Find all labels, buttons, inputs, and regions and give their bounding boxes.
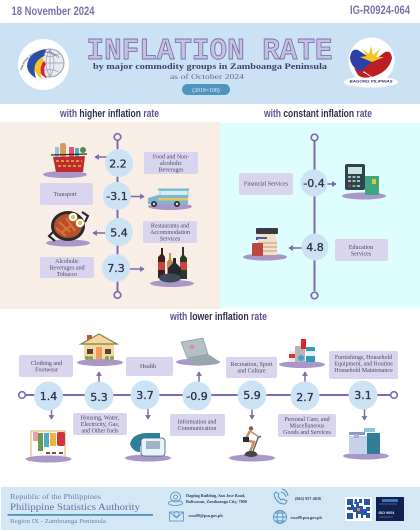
value 2.2: 2.2 xyxy=(109,158,127,170)
icon: grocery basket xyxy=(43,143,87,178)
icon: calculator and card xyxy=(342,164,386,200)
label: restaurants: Accommodation xyxy=(150,230,190,236)
label: housing: and Other fuels xyxy=(82,428,119,434)
value 1.4 xyxy=(34,382,63,419)
label: housing: Electricity, Gas, xyxy=(81,422,120,428)
label: alcoholic: Tobacco xyxy=(57,272,77,278)
label: restaurants xyxy=(143,221,197,243)
title: INFLATION RATE xyxy=(86,34,332,69)
value 5.4 xyxy=(93,218,133,246)
icon: cyclist xyxy=(229,426,275,462)
agency name: Republic of the Philippines xyxy=(10,493,101,501)
label: housing xyxy=(73,413,127,435)
label: clothing: Footwear xyxy=(35,368,58,374)
ISO badge: ISO 9001 xyxy=(378,511,395,515)
agency name xyxy=(8,493,153,525)
label: food: Beverages xyxy=(158,168,184,174)
value -0.4 xyxy=(300,170,336,196)
panel: lower inflation xyxy=(19,334,398,462)
value 2.2 xyxy=(95,149,133,177)
timeline xyxy=(311,134,318,299)
label: restaurants: Services xyxy=(160,236,181,242)
value -3.1: -3.1 xyxy=(106,190,128,203)
label: health: Health xyxy=(140,364,156,370)
label: recreation: Recreation, Sport xyxy=(230,362,273,368)
base year pill xyxy=(182,84,230,95)
header band xyxy=(0,23,420,104)
label: transport: Transport xyxy=(53,192,77,198)
label: furnishings xyxy=(329,351,398,379)
heading: lower: with lower inflation rate xyxy=(169,311,267,323)
panel: constant inflation xyxy=(220,123,420,308)
label: furnishings: Furnishings, Household xyxy=(335,355,392,361)
icon: bottles xyxy=(150,247,194,287)
value 3.7: 3.7 xyxy=(136,389,154,402)
label: personal care: Goods and Services xyxy=(283,430,331,436)
date: 18 November 2024 xyxy=(12,4,95,18)
value 3.7 xyxy=(130,380,160,419)
label: education xyxy=(335,239,388,261)
website: rsso09.psa.gov.ph xyxy=(290,515,322,520)
icon: blood pressure monitor xyxy=(125,433,171,462)
label: financial: Financial Services xyxy=(244,182,289,188)
label: furnishings: Equipment, and Routine xyxy=(334,362,393,368)
icon: jeepney xyxy=(148,188,192,210)
heading: higher: with higher inflation rate xyxy=(59,108,159,120)
icon: email xyxy=(170,512,184,521)
phone number: (062) 957-4636 xyxy=(295,496,321,501)
label: personal care: Personal Care, and xyxy=(284,417,330,423)
address xyxy=(186,493,247,504)
value 5.9 xyxy=(238,380,266,419)
label: alcoholic: Beverages and xyxy=(49,266,85,272)
label: housing: Housing, Water, xyxy=(81,416,120,422)
value 5.4: 5.4 xyxy=(110,226,128,240)
label: personal care xyxy=(278,414,336,437)
value 5.3: 5.3 xyxy=(90,391,108,404)
icon: clothes rack xyxy=(26,431,72,462)
icon: home furnishings xyxy=(343,428,389,460)
label: food: alcoholic xyxy=(160,161,182,167)
timeline xyxy=(114,134,121,298)
value 4.8 xyxy=(289,234,328,260)
icon: personal care products xyxy=(279,339,325,368)
address: Baliwasan, Zamboanga City, 7000 xyxy=(186,499,247,504)
logo: Bagong Pilipinas xyxy=(344,38,398,88)
label: food xyxy=(144,152,198,174)
icon: house xyxy=(77,334,123,366)
logo: Bagong Pilipinas: BAGONG PILIPINAS xyxy=(350,78,393,84)
QR code xyxy=(345,497,372,521)
label: education: Services xyxy=(351,252,372,258)
as of date: as of October 2024 xyxy=(170,72,244,81)
panel: higher inflation xyxy=(0,122,220,309)
agency name: Philippine Statistics Authority xyxy=(10,503,140,513)
value 2.7 xyxy=(290,372,320,410)
value 4.8: 4.8 xyxy=(306,241,324,254)
logo: PSA xyxy=(18,39,69,90)
label: restaurants: Restaurants and xyxy=(151,224,189,230)
logo: PSA: PHILIPPINE STATISTICS AUTHORITY xyxy=(20,50,60,70)
icon: phone xyxy=(274,489,288,504)
value 3.1 xyxy=(348,380,378,420)
label: transport xyxy=(40,183,93,205)
value 1.4: 1.4 xyxy=(40,390,57,403)
value -3.1 xyxy=(103,182,144,210)
subtitle: by major commodity groups in Zamboanga Peninsula xyxy=(93,61,328,71)
timeline xyxy=(19,392,397,398)
label: food: Food and Non- xyxy=(153,154,189,160)
label: recreation xyxy=(226,357,277,378)
email: rsso09@psa.gov.ph xyxy=(188,513,223,518)
value 5.9: 5.9 xyxy=(243,389,261,402)
footer xyxy=(1,487,420,530)
value -0.9 xyxy=(182,372,212,410)
label: health xyxy=(126,357,173,376)
icon: sizzling pan xyxy=(46,211,90,246)
label: information: Communication xyxy=(178,426,216,432)
heading: constant: with constant inflation rate xyxy=(263,108,372,120)
label: information xyxy=(170,414,225,436)
label: education: Education xyxy=(349,245,373,251)
value 5.3 xyxy=(84,372,114,410)
icon: location pin xyxy=(168,492,182,506)
base year pill: (2018=100) xyxy=(192,87,220,94)
label: clothing: Clothing and xyxy=(31,361,62,367)
label: information: Information and xyxy=(178,418,216,426)
label: alcoholic xyxy=(40,257,94,278)
address: Dagdag Building, San Jose Road, xyxy=(186,493,245,498)
value 2.7: 2.7 xyxy=(296,391,314,404)
value 7.3 xyxy=(102,254,144,282)
agency name: Region IX - Zamboanga Peninsula xyxy=(10,518,106,525)
ISO badge xyxy=(376,497,404,521)
value 3.1: 3.1 xyxy=(354,389,372,402)
icon: books xyxy=(243,228,287,260)
icon: laptop xyxy=(176,338,220,366)
label: furnishings: Household Maintenance xyxy=(334,368,393,374)
value -0.9: -0.9 xyxy=(186,390,208,403)
value -0.4: -0.4 xyxy=(303,177,325,190)
icon: globe xyxy=(274,510,286,524)
label: personal care: Miscellaneous xyxy=(290,424,325,430)
label: clothing xyxy=(19,355,73,377)
label: recreation: and Culture xyxy=(237,368,266,374)
label: alcoholic: Alcoholic xyxy=(55,259,79,265)
label: financial xyxy=(239,173,293,195)
value 7.3: 7.3 xyxy=(107,262,125,275)
